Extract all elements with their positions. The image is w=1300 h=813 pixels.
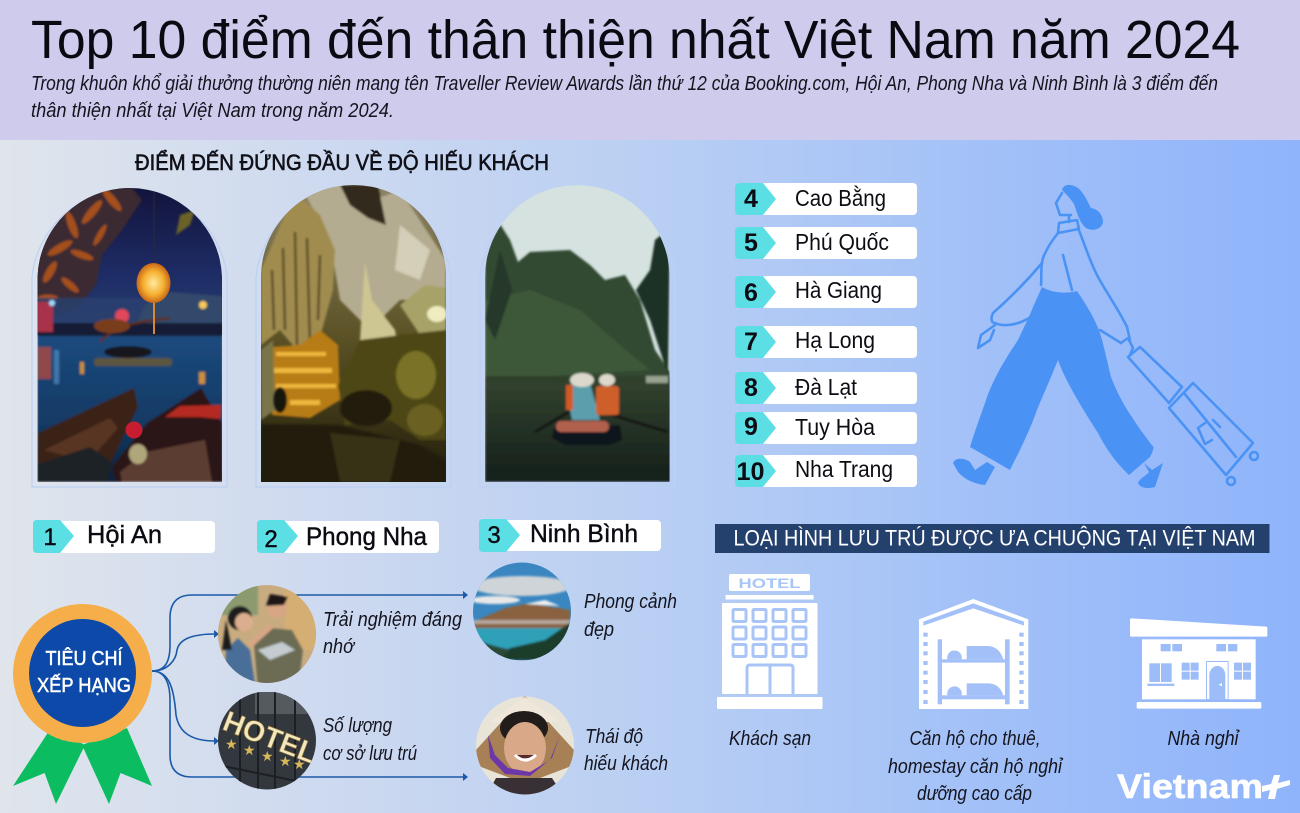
rank 7 [735, 326, 917, 358]
label: apartment: dưỡng cao cấp [917, 783, 1032, 805]
title: Top 10 điểm đến thân thiện nhất Việt Nam năm 2024 [31, 10, 1240, 70]
subtitle [31, 73, 1218, 122]
rank 9 [735, 412, 917, 444]
hair [1062, 185, 1103, 230]
photo: Hoi An [37, 185, 223, 482]
rank 10: 10 [736, 458, 764, 486]
label: memorable experience: Trải nghiệm đáng [323, 609, 462, 631]
icon: apartment [919, 599, 1028, 709]
label: number of accommodations: cơ sở lưu trú [323, 743, 417, 765]
rank 10 [735, 455, 917, 487]
label: guesthouse: Nhà nghỉ [1168, 728, 1240, 750]
label: hotel: Khách sạn [729, 728, 811, 750]
icon: hotel [717, 574, 822, 709]
photo: hotel: ★ [225, 736, 238, 752]
label: scenery: Phong cảnh [584, 591, 677, 613]
label: number of accommodations: Số lượng [323, 715, 392, 737]
photo: hospitable woman [476, 696, 574, 800]
rank 10: Nha Trang [795, 456, 893, 482]
medal: ranking criteria [13, 604, 152, 804]
photo: hotel: ★ [279, 753, 292, 769]
label: apartment [888, 728, 1063, 805]
photo: hotel: HOTEL [218, 706, 321, 770]
rank 6 [735, 276, 917, 308]
label: memorable experience: nhớ [323, 636, 356, 658]
trousers [970, 287, 1154, 475]
photo: hotel [218, 692, 321, 790]
rank 8: Đà Lạt [795, 374, 858, 400]
badge: Hoi An [33, 520, 215, 553]
badge: Ninh Binh: Ninh Bình [530, 520, 638, 548]
rank 6: Hà Giang [795, 277, 882, 303]
rank 4 [735, 183, 917, 215]
ribbon [13, 728, 152, 804]
badge: Phong Nha: Phong Nha [306, 523, 427, 551]
badge: Ninh Binh [479, 519, 661, 552]
ranking list 4-10 [735, 183, 917, 487]
logo: Vietnam+: Vietnam [1117, 768, 1263, 806]
badge: Phong Nha: 2 [264, 526, 278, 553]
banner: accommodation heading: LOẠI HÌNH LƯU TRÚ ĐƯỢC ƯA CHUỘNG TẠI VIỆT NAM [734, 526, 1256, 550]
icon: hotel: HOTEL [738, 575, 801, 591]
label: hospitality [584, 726, 668, 775]
rank 7: 7 [744, 328, 758, 356]
label: apartment: homestay căn hộ nghỉ [888, 756, 1063, 778]
rank 4: Cao Bằng [795, 185, 886, 211]
medal: ranking criteria: TIÊU CHÍ [46, 647, 123, 670]
badge: Hoi An: 1 [43, 524, 57, 551]
shoes [953, 459, 1163, 488]
photo: Phong Nha [261, 185, 447, 485]
badge: Ninh Binh: 3 [487, 522, 501, 549]
label: apartment: Căn hộ cho thuê, [910, 728, 1040, 750]
icon: guesthouse [1130, 618, 1267, 709]
rank 7: Hạ Long [795, 327, 875, 353]
connector arrows [152, 591, 468, 781]
badge: Phong Nha [257, 520, 439, 553]
heading: top destinations: ĐIỂM ĐẾN ĐỨNG ĐẦU VỀ ĐỘ HIẾU KHÁCH [135, 150, 549, 175]
photo: hotel: ★ [261, 748, 274, 764]
rank 5: Phú Quốc [795, 229, 889, 255]
label: number of accommodations [323, 715, 417, 765]
rank 9: Tuy Hòa [795, 414, 875, 440]
rank 6: 6 [744, 279, 758, 307]
rank 5 [735, 227, 917, 259]
medal: ranking criteria: XẾP HẠNG [37, 674, 131, 697]
outlines of body, arms and suitcase [978, 193, 1258, 485]
subtitle: thân thiện nhất tại Việt Nam trong năm 2024. [31, 100, 394, 122]
photo: hotel: ★ [243, 742, 256, 758]
illustration: traveller with suitcase [953, 185, 1258, 488]
photo: travellers [218, 585, 316, 690]
badge: Hoi An: Hội An [87, 521, 162, 549]
photo: Ninh Binh [485, 185, 671, 482]
arch outlines [32, 190, 675, 487]
label: hospitality: hiếu khách [584, 753, 668, 775]
header panel [0, 0, 1300, 140]
rank 8 [735, 372, 917, 404]
rank 8: 8 [744, 374, 758, 402]
rank 9: 9 [744, 413, 758, 441]
label: hospitality: Thái độ [585, 726, 643, 748]
photo: hotel: ★ [293, 756, 306, 772]
label: scenery [584, 591, 677, 641]
rank 4: 4 [744, 185, 758, 213]
label: memorable experience [323, 609, 462, 658]
rank 5: 5 [744, 229, 758, 257]
label: scenery: đẹp [584, 619, 614, 641]
photo: landscape [470, 562, 572, 660]
